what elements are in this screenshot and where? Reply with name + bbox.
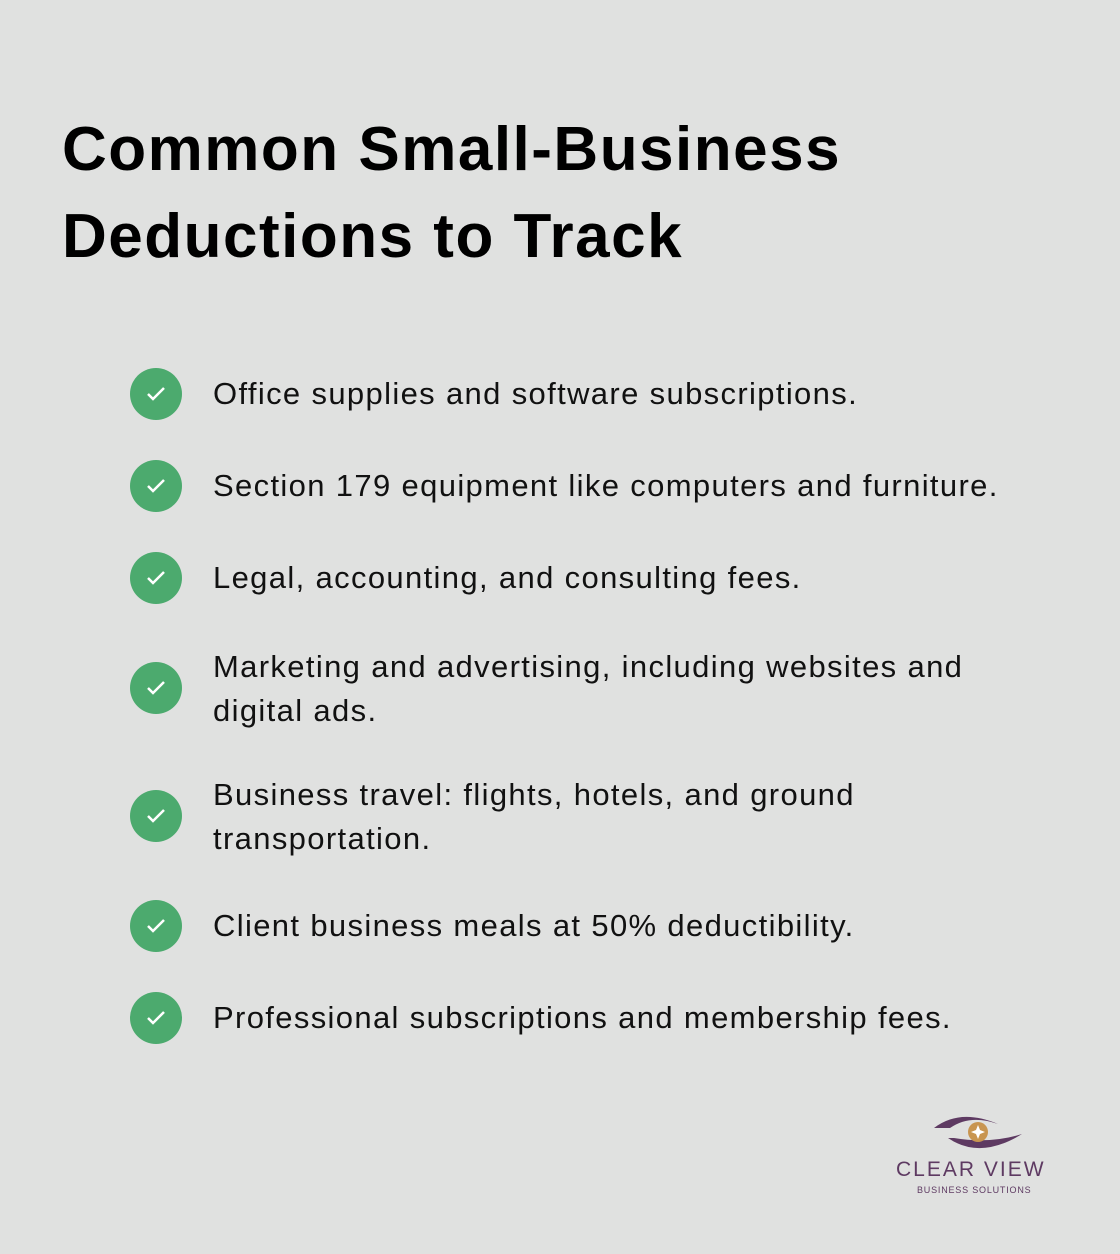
title: Deductions to Track — [62, 202, 683, 271]
item 3: Legal, accounting, and consulting fees. — [213, 560, 802, 595]
logo: BUSINESS SOLUTIONS — [917, 1185, 1031, 1195]
item 5: transportation. — [213, 821, 431, 856]
title: Common Small-Business — [62, 115, 841, 184]
item 7 — [130, 992, 952, 1044]
item 4: Marketing and advertising, including websites and — [213, 649, 963, 684]
logo: CLEAR VIEW — [896, 1158, 1046, 1181]
item 7: Professional subscriptions and membership fees. — [213, 1000, 952, 1035]
logo — [896, 1116, 1046, 1195]
title — [62, 115, 841, 271]
item 3 — [130, 552, 802, 604]
item 1: Office supplies and software subscriptions. — [213, 376, 858, 411]
icon: eye — [934, 1116, 1022, 1148]
item 2: Section 179 equipment like computers and furniture. — [213, 468, 999, 503]
item 4 — [130, 649, 963, 728]
item 6 — [130, 900, 855, 952]
item 1 — [130, 368, 858, 420]
item 6: Client business meals at 50% deductibility. — [213, 908, 855, 943]
item 5: Business travel: flights, hotels, and ground — [213, 777, 855, 812]
item 4: digital ads. — [213, 693, 377, 728]
item 5 — [130, 777, 855, 856]
item 2 — [130, 460, 999, 512]
